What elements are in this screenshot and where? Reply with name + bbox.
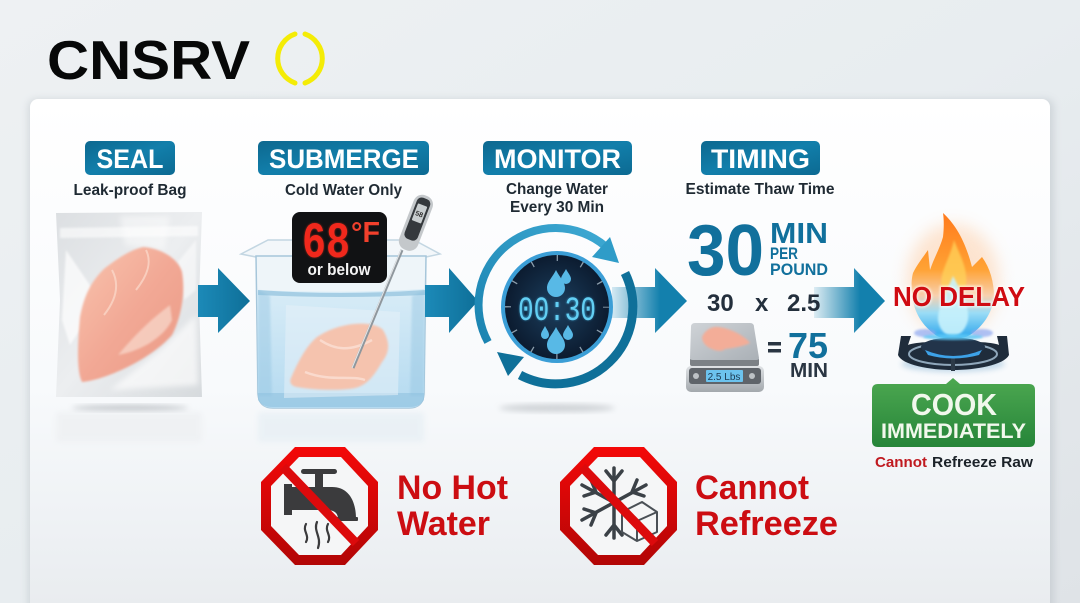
- timing heading: TIMING: [711, 144, 810, 174]
- arrow: seal to submerge: [198, 268, 250, 333]
- water drops: [541, 269, 573, 354]
- temperature display: 68F or below: or below: [308, 261, 371, 279]
- submerge subtitle: Cold Water Only: [285, 182, 402, 199]
- rate: 30 min per pound: [687, 211, 828, 291]
- step: monitor: [479, 141, 633, 412]
- temperature display: 68F or below: [292, 212, 387, 283]
- vacuum bag with chicken: [56, 212, 202, 442]
- result: equals 75 min: [768, 325, 828, 382]
- thermometer: [352, 192, 436, 368]
- monitor subtitle: [506, 181, 608, 216]
- step: timing: [686, 141, 835, 392]
- monitor subtitle: Every 30 Min: [510, 199, 604, 216]
- thermometer: 58: [414, 210, 424, 220]
- result: equals 75 min: 75: [788, 325, 828, 366]
- timing subtitle: Estimate Thaw Time: [686, 181, 835, 198]
- calculation: 30 x 2.5: 2.5: [787, 290, 820, 317]
- gas burner: [898, 334, 1009, 372]
- temperature display: 68F or below: 68: [302, 216, 350, 273]
- no hot water text: No Hot: [397, 469, 508, 507]
- water container with chicken: [241, 240, 440, 442]
- step: cook: [872, 213, 1035, 471]
- warning: no hot water: [261, 447, 508, 565]
- rate: 30 min per pound: 30: [687, 211, 764, 291]
- no delay text: NO DELAY: [893, 281, 1025, 312]
- result: equals 75 min: MIN: [790, 359, 828, 382]
- warning line: Refreeze Raw: [932, 454, 1033, 471]
- burner flame: [907, 213, 999, 338]
- cannot refreeze text: Cannot: [695, 469, 809, 507]
- arrow: monitor to timing: [612, 268, 687, 333]
- clock dial: [503, 253, 611, 361]
- arrow: timing to no delay: [814, 268, 885, 333]
- seal subtitle: Leak-proof Bag: [74, 182, 186, 199]
- cook immediately callout: IMMEDIATELY: [881, 419, 1026, 443]
- temperature display: 68F or below: °F: [351, 217, 380, 249]
- temperature display: 68F or below: 68: [302, 216, 350, 273]
- seal heading: SEAL: [96, 144, 164, 174]
- no delay text: NO DELAY: [893, 281, 1025, 312]
- step: submerge: [241, 141, 440, 442]
- digital time: 00:30: [518, 293, 596, 331]
- steam: [305, 522, 329, 548]
- prohibition sign with snowflake: [560, 447, 677, 565]
- submerge heading: SUBMERGE: [269, 144, 419, 174]
- rate: 30 min per pound: MIN: [770, 218, 828, 250]
- rate: 30 min per pound: PER: [770, 245, 798, 263]
- warning: cannot refreeze: [560, 447, 838, 565]
- step: seal: [56, 141, 202, 442]
- monitor heading: MONITOR: [494, 144, 621, 174]
- cannot refreeze text: [695, 469, 838, 543]
- monitor subtitle: Change Water: [506, 181, 608, 198]
- no hot water text: [397, 469, 508, 543]
- arrow: submerge to monitor: [425, 268, 478, 333]
- warning line: Cannot: [875, 454, 927, 471]
- rate: 30 min per pound: POUND: [770, 261, 828, 279]
- logo: CNSRV: [47, 29, 322, 91]
- cook immediately callout: [872, 378, 1035, 447]
- faucet icon: [284, 469, 358, 521]
- logo wordmark: CNSRV: [47, 29, 250, 91]
- circular arrows: [479, 228, 633, 384]
- calculation: 30 x 2.5: x: [755, 290, 769, 317]
- calculation: 30 x 2.5: [707, 290, 820, 317]
- kitchen scale with chicken: 2.5 Lbs: [708, 372, 740, 383]
- cannot refreeze text: Refreeze: [695, 505, 838, 543]
- warning line: [875, 454, 1033, 471]
- logo yellow ring: [278, 34, 322, 83]
- prohibition sign with faucet: [261, 447, 378, 565]
- calculation: 30 x 2.5: 30: [707, 290, 734, 317]
- cook immediately callout: COOK: [911, 387, 998, 422]
- no hot water text: Water: [397, 505, 490, 543]
- digital time: 00:30: [518, 293, 596, 331]
- main panel: [28, 99, 1054, 603]
- snowflake icon: [582, 468, 646, 538]
- kitchen scale with chicken: [686, 323, 764, 392]
- timer icon: [479, 228, 633, 412]
- ice cube icon: [622, 502, 657, 541]
